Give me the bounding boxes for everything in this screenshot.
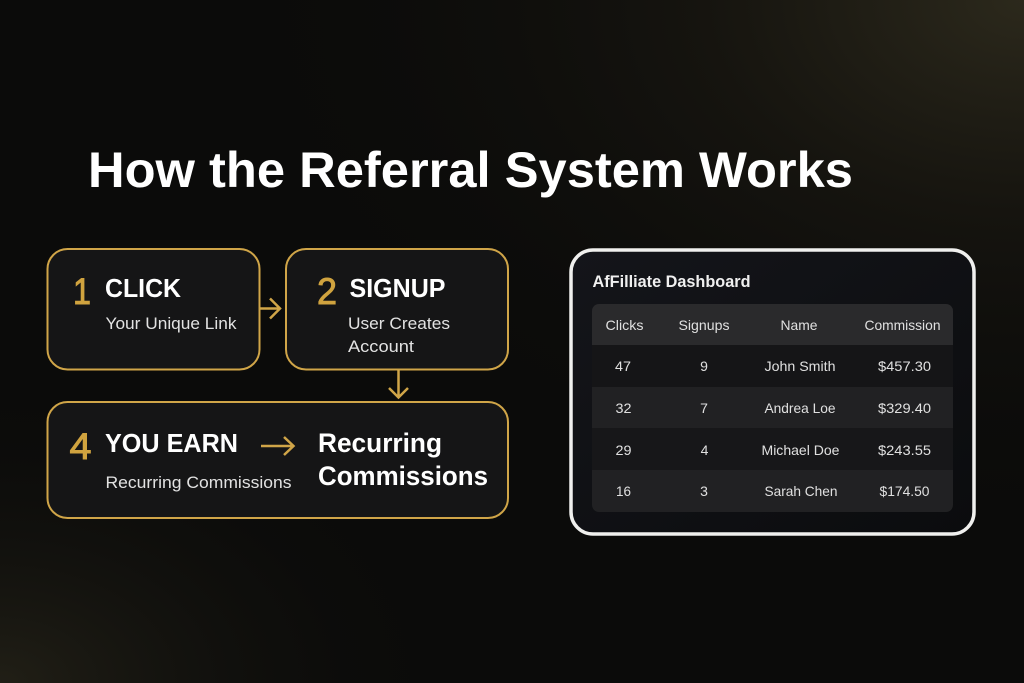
step 4 number: 4 <box>70 426 92 467</box>
table row: Sarah Chen: Sarah Chen <box>764 483 838 499</box>
table row: Michael Doe: 29 <box>616 442 632 458</box>
table row: Andrea Loe: 7 <box>700 400 708 416</box>
step 2 box: signup <box>286 249 508 370</box>
step 1 description: Your Unique Link <box>106 314 237 333</box>
table row: John Smith: John Smith <box>764 358 836 374</box>
arrow: signup to earn <box>389 370 408 398</box>
table row: Michael Doe: Michael Doe <box>762 442 840 458</box>
arrow: earn to recurring <box>261 437 294 455</box>
step 2 description: User Creates <box>348 314 450 333</box>
table header row <box>592 304 953 345</box>
step 1 box: click <box>48 249 260 370</box>
table row: Michael Doe <box>592 428 953 470</box>
table row: John Smith: 9 <box>700 358 708 374</box>
panel: affiliate dashboard <box>571 250 974 534</box>
table row: Andrea Loe <box>592 387 953 428</box>
step 2 heading: SIGNUP <box>350 273 446 303</box>
table row: John Smith: 47 <box>615 358 631 374</box>
step 2 number: 2 <box>317 271 337 312</box>
table header row: Commission <box>864 317 940 333</box>
table header row: Clicks <box>606 317 644 333</box>
table row: Andrea Loe: 32 <box>616 400 632 416</box>
step 1 heading: CLICK <box>105 273 181 303</box>
step 2 description <box>348 314 450 356</box>
table row: Michael Doe: 4 <box>701 442 709 458</box>
recurring commissions label: Commissions <box>318 461 488 491</box>
table row: John Smith <box>592 345 953 387</box>
step 1 number: 1 <box>73 271 91 312</box>
title: How the Referral System Works <box>88 142 853 198</box>
table row: Sarah Chen: 16 <box>616 483 631 499</box>
dashboard heading: AfFilliate Dashboard <box>592 272 750 291</box>
arrow: click to signup <box>260 298 280 318</box>
table row: Michael Doe: $243.55 <box>878 442 931 458</box>
table row: Sarah Chen: 3 <box>700 483 708 499</box>
table row: Andrea Loe: $329.40 <box>878 400 931 416</box>
step 4 description: Recurring Commissions <box>106 473 292 492</box>
step 4 box: you earn <box>48 402 508 518</box>
step 4 heading: YOU EARN <box>105 428 238 458</box>
recurring commissions label <box>318 428 488 491</box>
table header row: Name <box>780 317 818 333</box>
step 2 description: Account <box>348 337 414 356</box>
table row: Andrea Loe: Andrea Loe <box>764 400 836 416</box>
table header row: Signups <box>678 317 730 333</box>
table row: Sarah Chen <box>592 470 953 512</box>
recurring commissions label: Recurring <box>318 428 442 458</box>
data table <box>592 304 953 512</box>
table row: John Smith: $457.30 <box>878 358 931 374</box>
table row: Sarah Chen: $174.50 <box>880 483 930 499</box>
